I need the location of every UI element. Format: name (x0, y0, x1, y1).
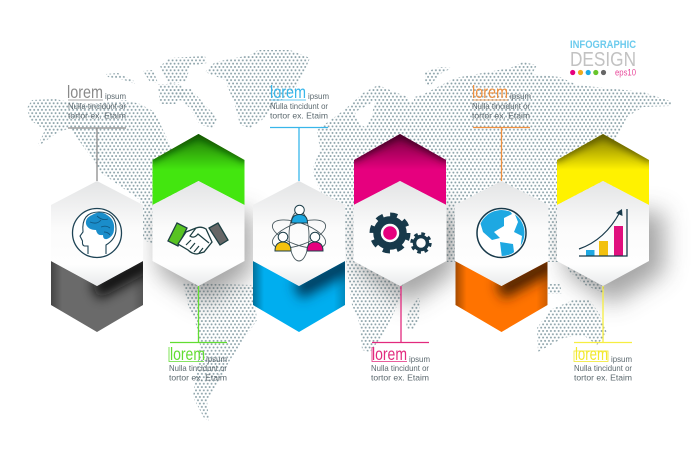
person pink (307, 232, 323, 251)
text block: blue: ipsum (308, 92, 329, 101)
icon: handshake (168, 223, 228, 254)
connector gray (68, 128, 126, 181)
person blue (292, 205, 308, 223)
icon: people atom (269, 205, 329, 261)
text block: gray: ipsum (105, 92, 126, 101)
text block: yellow: Nulla tincidunt or (574, 364, 632, 373)
text block: pink (371, 344, 430, 382)
North America (27, 99, 200, 270)
icon: brain in head (72, 208, 122, 258)
person yellow (275, 232, 291, 251)
map inland gaps (355, 92, 414, 128)
arrow head (616, 209, 622, 216)
arrow (579, 212, 620, 249)
text block: orange: Nulla tincidunt or (472, 102, 530, 111)
band: top yellow (557, 134, 649, 205)
eps label: eps10 (615, 68, 636, 78)
Indonesia (548, 284, 562, 294)
text block: yellow (574, 344, 632, 382)
text block: gray: lorem (67, 82, 103, 102)
text block: green: tortor ex. Etaim (169, 374, 227, 382)
icon: globe (477, 208, 530, 262)
text block: green: lorem (170, 344, 205, 364)
text block: orange: tortor ex. Etaim (472, 112, 530, 120)
left cuff (168, 223, 187, 246)
orbits (269, 211, 329, 261)
text block: pink: ipsum (409, 355, 430, 364)
hexagon 1 (51, 181, 143, 286)
text block: blue: tortor ex. Etaim (270, 112, 328, 120)
text block: green: Nulla tincidunt or (169, 364, 227, 373)
connector green (170, 286, 227, 342)
text block: orange: ipsum (510, 92, 531, 101)
color dots (570, 70, 606, 75)
connector pink (372, 286, 429, 342)
large gear (372, 216, 408, 250)
South America (183, 283, 257, 421)
text block: orange (472, 82, 531, 120)
title line 1: INFOGRAPHIC (570, 39, 636, 51)
hexagon 2 (152, 181, 244, 286)
band: bottom blue (253, 261, 351, 333)
axes (579, 209, 627, 256)
hexagon 5 (455, 181, 548, 286)
connector yellow (574, 286, 632, 342)
icon: gears (372, 216, 430, 252)
text block: yellow: ipsum (611, 355, 632, 364)
text block: blue: Nulla tincidunt or (270, 102, 328, 111)
text block: yellow: lorem (575, 344, 608, 364)
hexagon drop shadows (158, 212, 664, 304)
Greenland (205, 50, 310, 128)
icon: growth chart (579, 209, 627, 256)
connector lines (68, 128, 632, 342)
small island group (143, 70, 158, 83)
text block: green (169, 344, 227, 382)
hexagon 3 (253, 181, 345, 286)
text block: gray (67, 82, 126, 120)
hexagon 6 (557, 181, 649, 286)
text block: pink: lorem (372, 344, 407, 364)
text block: yellow: tortor ex. Etaim (574, 374, 632, 382)
hexagon 4 (354, 181, 446, 286)
Novaya Zemlya island (425, 67, 452, 86)
text block: green: ipsum (206, 355, 227, 364)
text block: blue: lorem (270, 82, 306, 102)
bars (586, 250, 594, 256)
text block: pink: Nulla tincidunt or (371, 364, 429, 373)
band: bottom orange (456, 261, 554, 333)
right cuff (209, 223, 228, 245)
world map dotted (27, 50, 673, 421)
title badge (570, 39, 636, 78)
band: top magenta (354, 134, 446, 205)
Australia (537, 300, 607, 352)
Eurasia and Africa (313, 62, 673, 352)
Labrador (170, 88, 217, 128)
connector blue (270, 128, 328, 181)
text block: orange: lorem (472, 82, 508, 102)
Arctic islands (160, 56, 207, 84)
Madagascar (406, 298, 420, 330)
band: top green (152, 134, 244, 205)
sparse northern islands (106, 73, 135, 84)
text block: pink: tortor ex. Etaim (371, 374, 429, 382)
text block: blue (270, 82, 329, 120)
Baffin island (158, 84, 187, 104)
small gear (412, 234, 430, 252)
text block: gray: tortor ex. Etaim (68, 112, 126, 120)
band: bottom gray (51, 261, 149, 333)
title line 2: DESIGN (570, 49, 636, 71)
text block: gray: Nulla tincidunt or (68, 102, 126, 111)
connector orange (473, 128, 530, 181)
hands (178, 227, 212, 254)
